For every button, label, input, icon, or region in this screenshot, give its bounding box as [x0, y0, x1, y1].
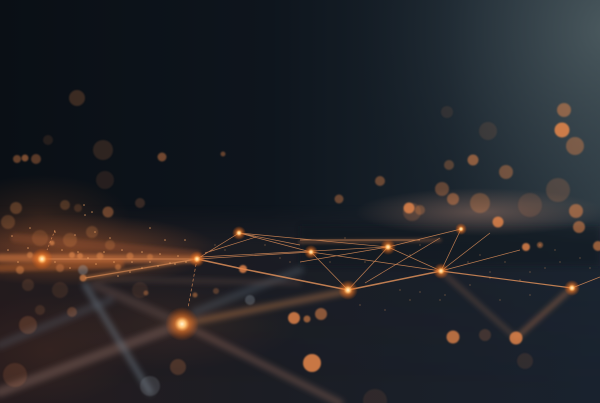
blurred blobs inside the band — [1, 200, 219, 315]
scattered particles — [8, 205, 590, 310]
dense glowing band of the left horizon — [0, 238, 440, 278]
dark band behind the horizon — [300, 226, 600, 266]
blurred foreground beams — [0, 270, 572, 403]
bokeh lights — [3, 90, 600, 403]
orange haze along the horizon — [0, 175, 600, 403]
glowing network nodes — [31, 223, 580, 341]
network lines — [42, 229, 600, 308]
